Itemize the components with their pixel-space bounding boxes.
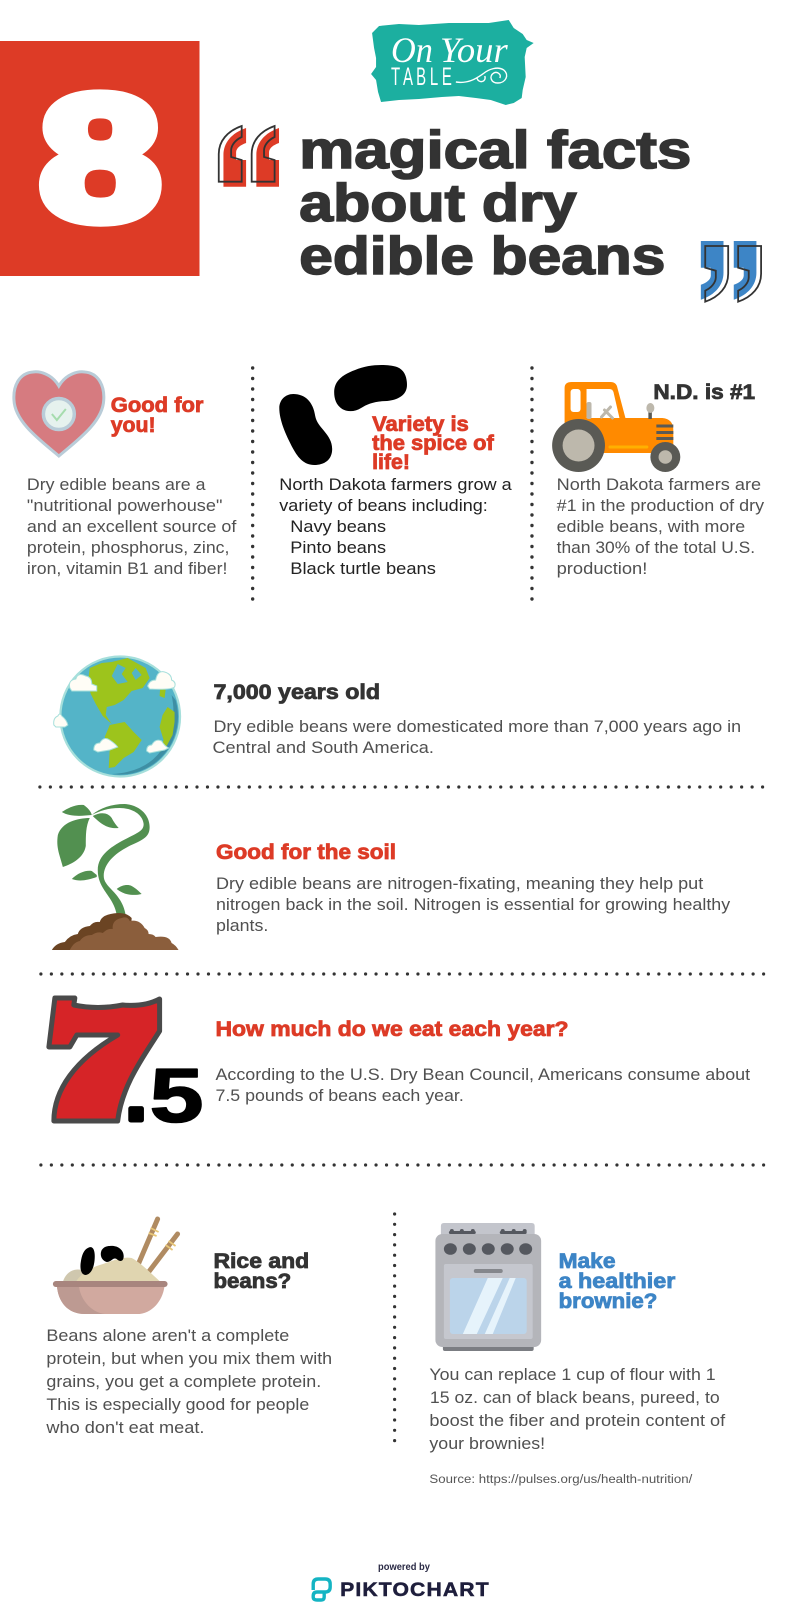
text block: North Dakota farmers grow a [279,475,512,494]
text block: production! [557,559,647,578]
powered by Piktochart footer: PIKTOCHART [340,1580,490,1601]
heading [559,1250,675,1313]
graphic: 7.5 numeral: . [126,1052,147,1137]
logo: On Your Table: TABLE [391,63,452,91]
text block [216,874,731,935]
text block: and an excellent source of [27,517,237,536]
logo: On Your Table: On [391,30,433,70]
text block: Pinto beans [290,538,386,557]
logo: On Your Table [371,20,534,105]
text block: who don't eat meat. [45,1418,204,1437]
heading: beans? [213,1270,291,1293]
text block: boost the fiber and protein content of [429,1411,725,1430]
icon: heart with check [14,372,104,456]
icon: oven [435,1223,541,1351]
text block: 15 oz. can of black beans, pureed, to [430,1388,720,1407]
graphic: 7.5 numeral [49,998,203,1139]
text block [27,475,237,578]
heading: Make [559,1250,615,1273]
text block: Navy beans [290,517,386,536]
icon: black beans [279,365,407,465]
panel: healthier brownie [429,1223,725,1486]
text block [429,1365,725,1453]
heading: a healthier [559,1270,675,1293]
text block: #1 in the production of dry [557,496,765,515]
heading: Good for [111,394,203,417]
icon: bowl of rice and beans [53,1219,178,1314]
icon: sprout in soil [52,804,179,950]
text block: Black turtle beans [290,559,436,578]
red panel with number 8: 8 [39,60,161,257]
text block: Dry edible beans are nitrogen-fixating, meaning they help put [216,874,704,893]
graphic: 7.5 numeral: 5 [150,1054,203,1139]
text block [212,717,741,757]
panel: N.D. is #1 [552,381,765,578]
icon: closing quote marks [701,241,761,302]
title [299,121,691,286]
text block [279,475,512,578]
text block: grains, you get a complete protein. [46,1372,321,1391]
text block: than 30% of the total U.S. [557,538,755,557]
logo: On Your Table: Your [440,30,509,70]
text block: North Dakota farmers are [557,475,761,494]
heading: N.D. is #1 [653,381,755,404]
powered by Piktochart footer: powered by [378,1562,430,1573]
powered by Piktochart footer [313,1562,490,1601]
panel: 7,000 years old [54,656,741,776]
heading [111,394,203,437]
title: edible beans [299,227,665,286]
heading: life! [372,451,410,474]
source note: Source: https://pulses.org/us/health-nutrition/ [429,1472,693,1486]
heading: Good for the soil [216,841,396,864]
text block: protein, but when you mix them with [46,1349,332,1368]
text block: protein, phosphorus, zinc, [27,538,229,557]
text block: Central and South America. [212,738,434,757]
text block: You can replace 1 cup of flour with 1 [429,1365,716,1384]
text block: your brownies! [429,1434,545,1453]
text block [215,1065,750,1105]
panel: good for the soil [52,804,731,950]
text block: plants. [216,916,268,935]
text block: iron, vitamin B1 and fiber! [27,559,227,578]
icon: Piktochart logo [313,1579,330,1600]
red panel with number 8 [0,41,200,276]
icon: opening quote marks [219,126,279,187]
panel: how much do we eat [49,998,750,1139]
panel: rice and beans [45,1219,332,1437]
title: about dry [299,174,577,233]
text block: "nutritional powerhouse" [27,496,222,515]
heading: brownie? [559,1290,657,1313]
text block: Dry edible beans were domesticated more than 7,000 years ago in [213,717,741,736]
icon: tractor [552,382,680,472]
text block: nitrogen back in the soil. Nitrogen is essential for growing healthy [216,895,731,914]
text block: This is especially good for people [46,1395,309,1414]
heading: the spice of [372,432,495,455]
text block: variety of beans including: [279,496,488,515]
text block: Dry edible beans are a [27,475,206,494]
heading: you! [111,414,156,437]
icon: globe [54,656,180,776]
heading: 7,000 years old [213,681,380,704]
text block: 7.5 pounds of beans each year. [215,1086,464,1105]
text block: edible beans, with more [557,517,745,536]
panel: variety [279,365,512,578]
panel: good for you [14,372,237,578]
text block [557,475,765,578]
text block [45,1326,332,1437]
text block: Beans alone aren't a complete [46,1326,289,1345]
text block: According to the U.S. Dry Bean Council, Americans consume about [215,1065,750,1084]
heading: Variety is [372,413,469,436]
heading: Rice and [213,1250,309,1273]
heading [213,1250,309,1293]
title: magical facts [299,121,691,180]
heading [372,413,495,474]
heading: How much do we eat each year? [215,1018,569,1041]
